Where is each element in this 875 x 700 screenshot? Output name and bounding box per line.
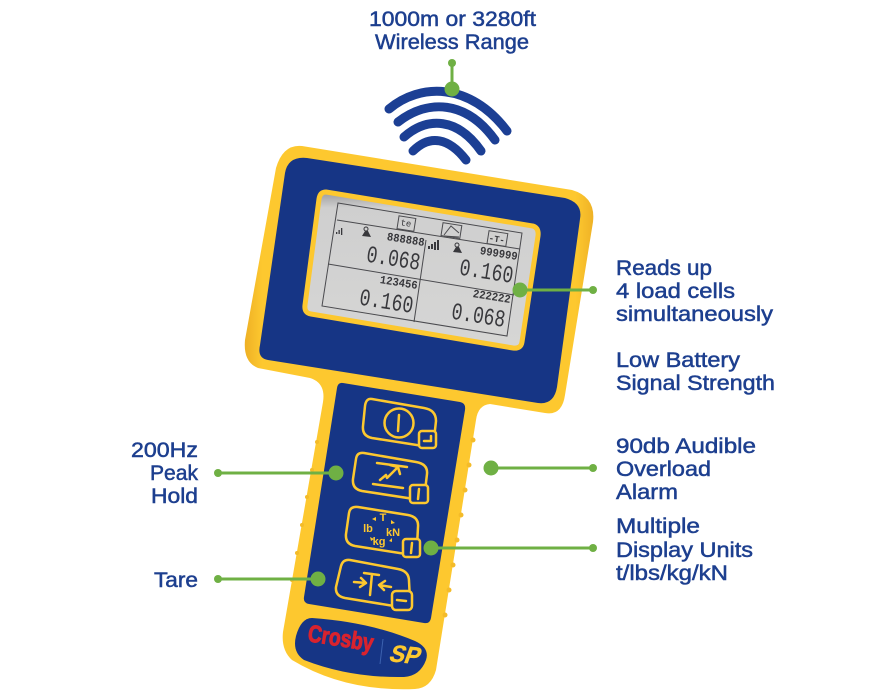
units button: lb (363, 523, 373, 535)
power button (363, 399, 436, 448)
callout connector: peak hold (214, 466, 344, 480)
label: load cells: Reads up (616, 257, 712, 280)
units button: T (380, 512, 387, 524)
screen readouts: 888888 (386, 231, 425, 250)
label: peak hold (131, 439, 198, 508)
icon: wireless signal arcs (389, 91, 507, 160)
label: tare: Tare (154, 569, 198, 592)
screen readouts: 123456 (379, 274, 418, 293)
label: display units: Multiple (616, 515, 700, 538)
handle grip ridges (290, 438, 476, 618)
screen readouts: -T- (488, 234, 505, 246)
peak hold button (353, 453, 428, 503)
label: peak hold: Hold (151, 485, 198, 508)
display screen (305, 192, 538, 348)
label: battery and signal: Signal Strength (616, 372, 775, 395)
label: audible alarm: Overload (616, 458, 711, 481)
handle and head casing (245, 146, 593, 689)
screen readouts: 0.160 (457, 256, 515, 291)
logo: Crosby SP (306, 620, 425, 670)
logo: Crosby SP: SP (386, 641, 425, 670)
screen readouts: 999999 (479, 245, 518, 264)
callout connector: tare (214, 572, 326, 586)
head blue panel (259, 158, 580, 403)
handle blue panel (304, 383, 465, 623)
label: display units: t/lbs/kg/kN (616, 562, 728, 585)
label: battery and signal (616, 349, 775, 395)
screen readouts (336, 216, 518, 335)
title: wireless range (369, 8, 536, 54)
label: load cells: simultaneously (616, 303, 774, 326)
label: load cells (616, 257, 774, 326)
label: audible alarm: 90db Audible (616, 435, 756, 458)
title: wireless range: 1000m or 3280ft (369, 8, 536, 31)
label: audible alarm (616, 435, 756, 504)
label: peak hold: Peak (150, 462, 198, 485)
callout connector: display units (424, 540, 597, 556)
screen grid (322, 203, 522, 336)
device body (245, 146, 593, 689)
units button: kg (373, 536, 385, 548)
logo plate (295, 618, 427, 677)
label: peak hold: 200Hz (131, 439, 198, 462)
screen readouts: 0.068 (449, 300, 507, 335)
label: audible alarm: Alarm (616, 481, 678, 504)
callout connector: audible alarm (484, 460, 597, 476)
label: display units: Display Units (616, 539, 753, 562)
units button (346, 507, 420, 557)
screen readouts: 0.068 (364, 243, 422, 278)
callout connector: load cells (512, 282, 597, 298)
units button: kN (386, 527, 400, 539)
label: display units (616, 515, 753, 585)
screen readouts: 222222 (472, 288, 511, 307)
label: battery and signal: Low Battery (616, 349, 741, 372)
tare button (336, 560, 412, 610)
logo: Crosby SP: Crosby (306, 620, 376, 657)
screen readouts: 0.160 (357, 286, 415, 321)
label: load cells: 4 load cells (616, 280, 735, 303)
screen frame (305, 192, 538, 348)
title: wireless range: Wireless Range (375, 31, 529, 54)
callout connector: wireless range (444, 59, 460, 96)
screen readouts: te (400, 218, 412, 230)
